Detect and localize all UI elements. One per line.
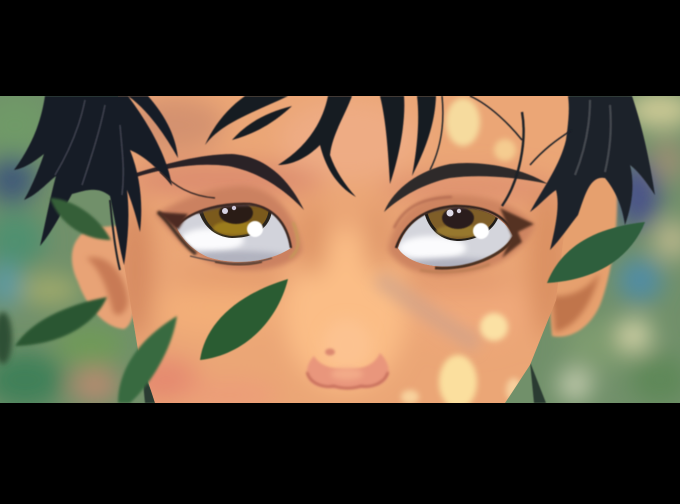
- leaf: upper left: [50, 198, 111, 240]
- hair strand highlights: [55, 100, 123, 195]
- hair: left tuft: [14, 96, 178, 265]
- illustration: close-up of face between letterbox bars: [0, 96, 680, 403]
- leaf: far left edge: [0, 312, 12, 364]
- leaf: centre: [200, 279, 288, 360]
- nose: [307, 319, 389, 389]
- face: [100, 96, 590, 409]
- hair: loose strands: [110, 96, 572, 270]
- leaf: bottom blur: [118, 316, 177, 403]
- eye: left: [155, 186, 302, 270]
- leaf: right: [547, 222, 645, 283]
- hair: right tuft: [530, 96, 655, 250]
- hair: top fringe strands: [205, 96, 436, 197]
- eyebrow: right: [384, 163, 548, 212]
- ear: right: [548, 173, 617, 337]
- scene: [0, 92, 680, 409]
- skin shading: [117, 97, 568, 409]
- ear: left: [72, 225, 136, 329]
- cheek shadow stroke: [378, 278, 478, 345]
- eyebrow: left: [133, 154, 304, 210]
- blurred foliage background: [0, 92, 680, 408]
- light spots: [401, 98, 522, 409]
- eye: right: [388, 195, 535, 276]
- neck shadow: [142, 362, 546, 403]
- leaf: lower left: [15, 297, 107, 346]
